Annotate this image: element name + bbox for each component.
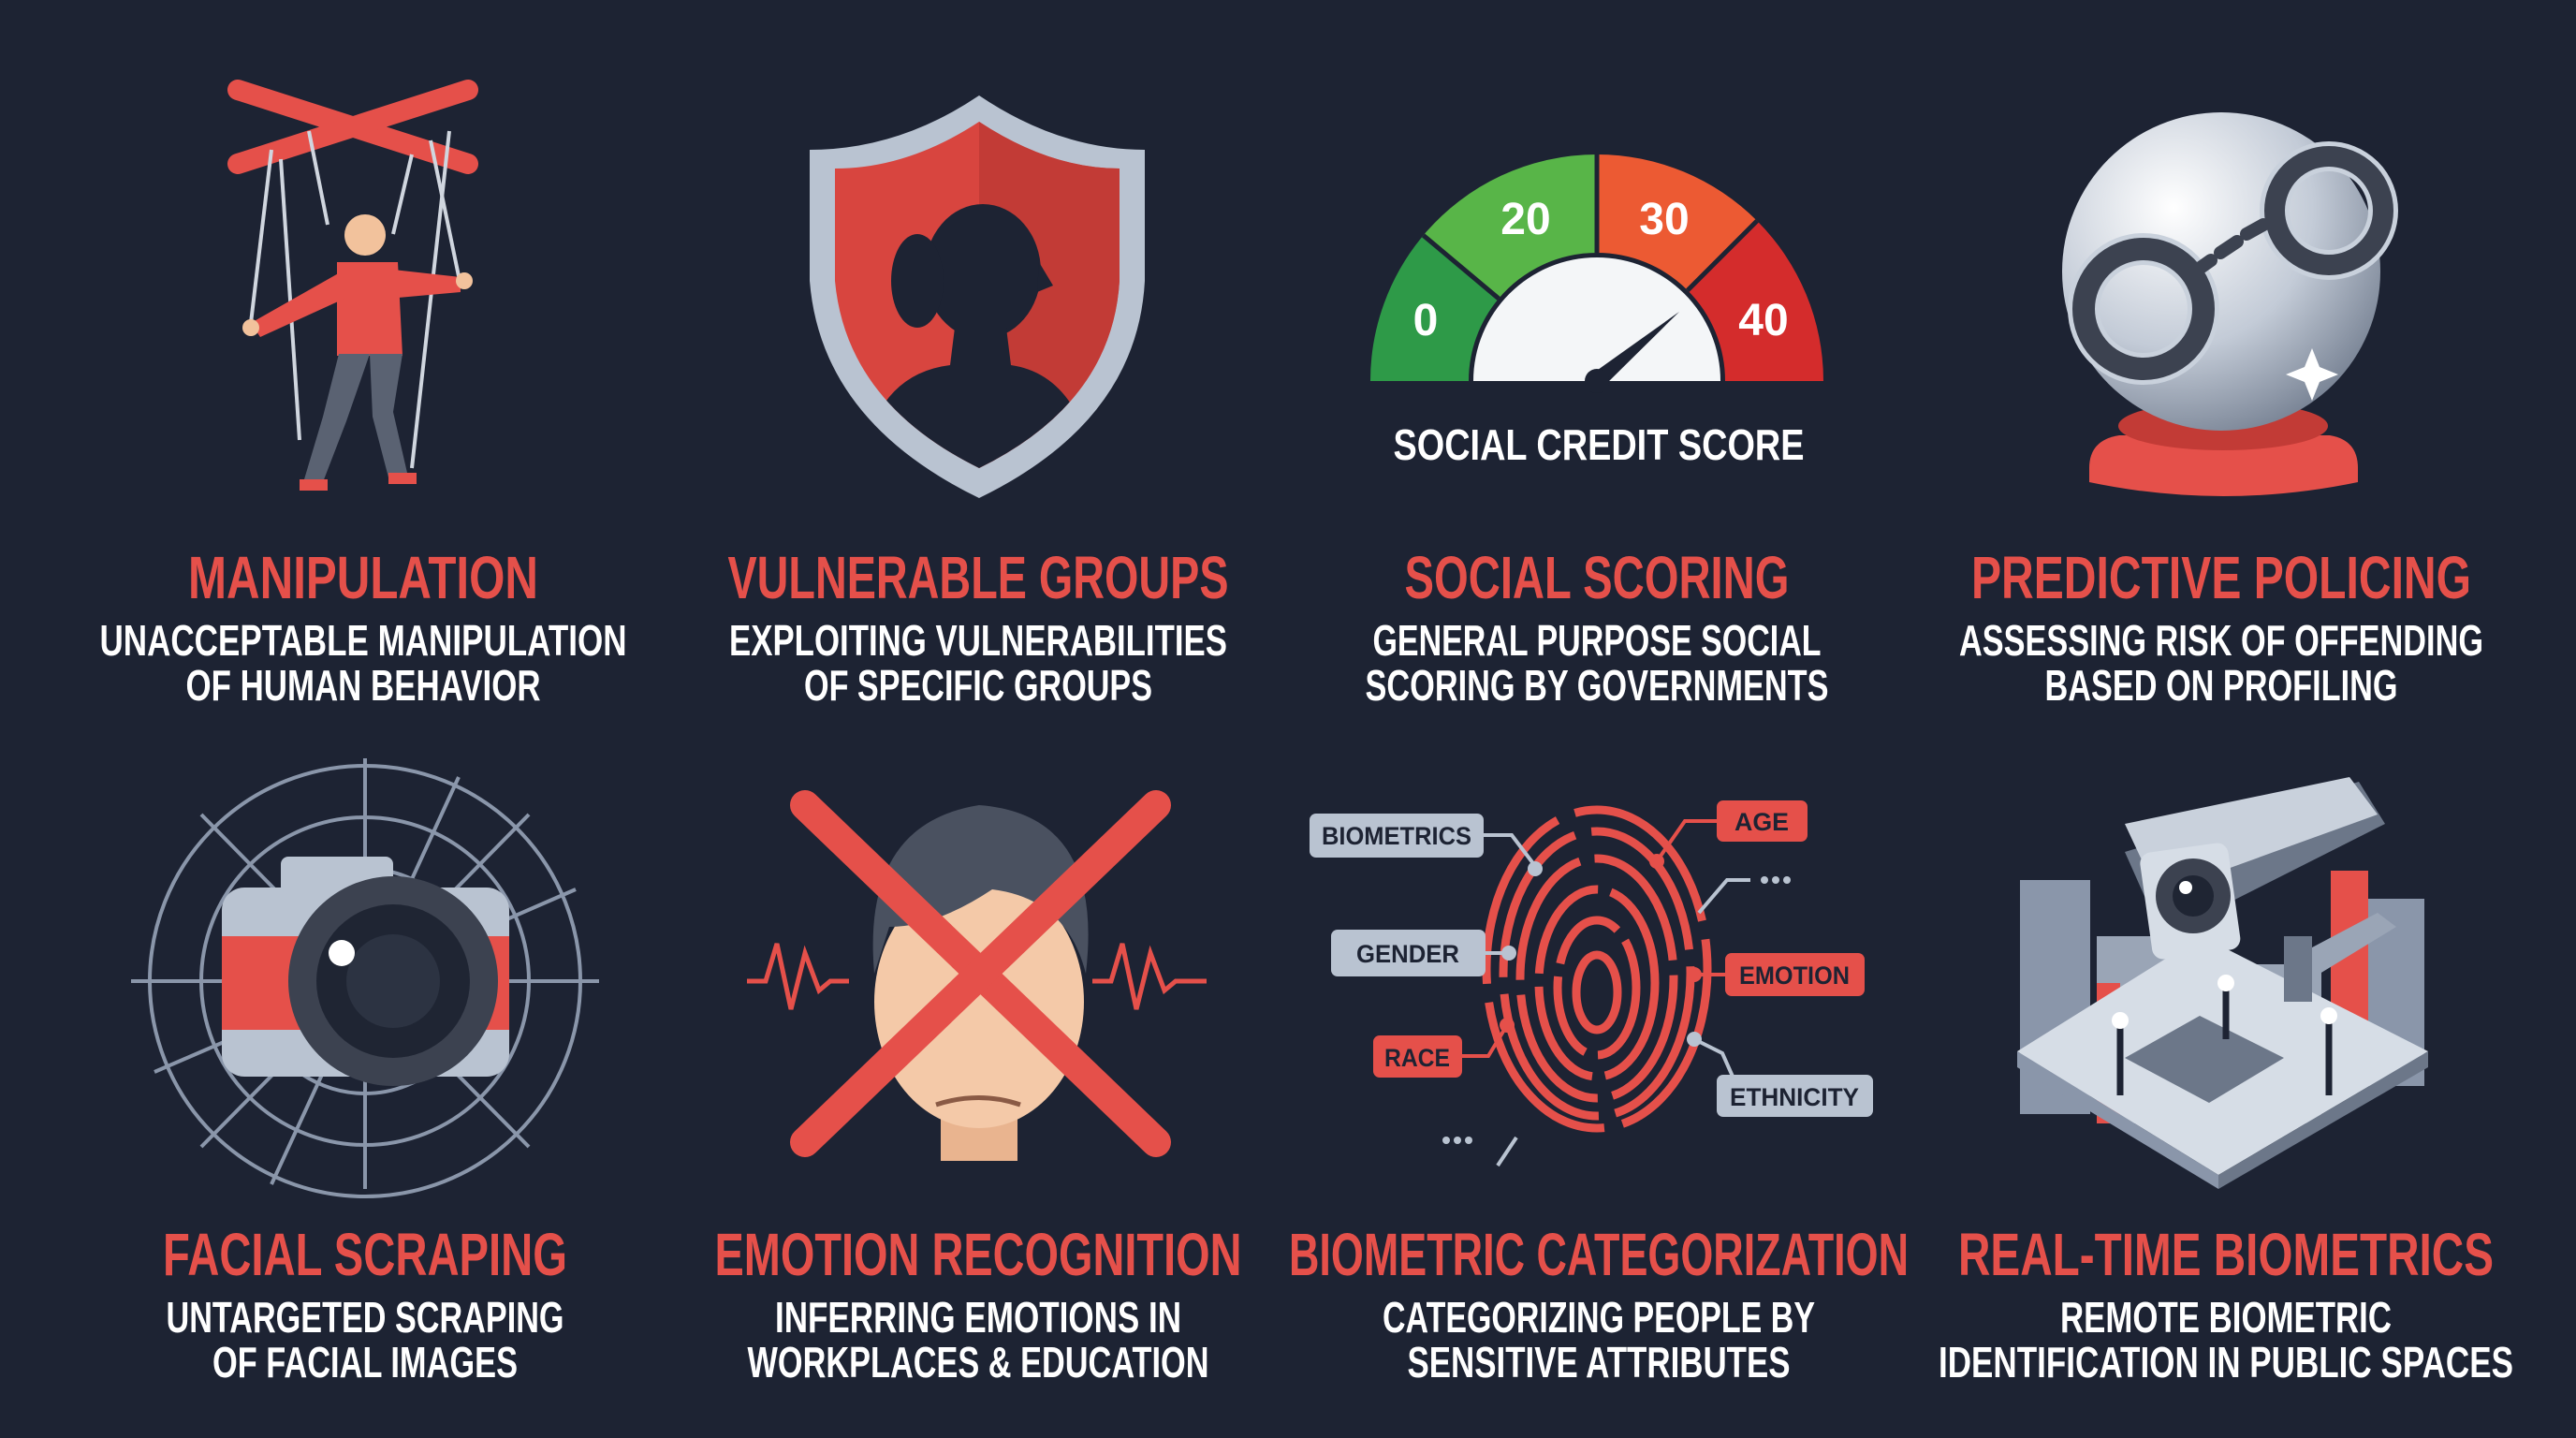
icon: social credit gauge <box>1370 154 1823 469</box>
heading row 2: CATEGORIZING PEOPLE BY <box>1383 1293 1815 1342</box>
heading row 1: SCORING BY GOVERNMENTS <box>1365 661 1829 710</box>
heading row 2: OF FACIAL IMAGES <box>212 1338 518 1387</box>
icon: fingerprint with labels: AGE <box>1734 808 1789 836</box>
icon: fingerprint with labels: ETHNICITY <box>1730 1083 1859 1111</box>
heading row 1: OF HUMAN BEHAVIOR <box>185 661 541 710</box>
icon: shield with silhouette <box>810 95 1145 498</box>
icon: fingerprint with labels: RACE <box>1384 1044 1450 1072</box>
heading row 1: SOCIAL SCORING <box>1404 544 1790 611</box>
heading row 2 <box>163 1221 2513 1387</box>
icon: crystal ball with handcuffs <box>2062 112 2383 496</box>
icon: web with camera <box>131 758 599 1196</box>
heading row 1: GENERAL PURPOSE SOCIAL <box>1372 616 1822 665</box>
icon: fingerprint with labels: BIOMETRICS <box>1322 822 1471 850</box>
heading row 2: FACIAL SCRAPING <box>163 1221 567 1288</box>
icon: fingerprint with labels: GENDER <box>1356 940 1459 968</box>
icon: surveillance camera over city <box>2017 777 2428 1189</box>
heading row 1: MANIPULATION <box>188 544 538 611</box>
icon: face with red X <box>747 805 1207 1161</box>
heading row 1: BASED ON PROFILING <box>2044 661 2398 710</box>
heading row 1: EXPLOITING VULNERABILITIES <box>729 616 1227 665</box>
heading row 2: REMOTE BIOMETRIC <box>2060 1293 2392 1342</box>
heading row 2: EMOTION RECOGNITION <box>715 1221 1241 1288</box>
heading row 2: INFERRING EMOTIONS IN <box>775 1293 1181 1342</box>
icon: fingerprint with labels <box>1310 800 1873 1166</box>
icon: social credit gauge: 20 <box>1500 195 1551 244</box>
icon: marionette <box>238 90 473 491</box>
heading row 1 <box>99 544 2483 710</box>
icon: social credit gauge: 0 <box>1413 296 1438 345</box>
heading row 1: OF SPECIFIC GROUPS <box>804 661 1152 710</box>
heading row 1: VULNERABLE GROUPS <box>728 544 1228 611</box>
heading row 2: SENSITIVE ATTRIBUTES <box>1408 1338 1790 1387</box>
icon: social credit gauge: SOCIAL CREDIT SCORE <box>1393 420 1805 469</box>
heading row 2: UNTARGETED SCRAPING <box>167 1293 564 1342</box>
heading row 1: UNACCEPTABLE MANIPULATION <box>99 616 627 665</box>
heading row 2: BIOMETRIC CATEGORIZATION <box>1289 1221 1909 1288</box>
icon: fingerprint with labels: EMOTION <box>1739 961 1850 990</box>
icon: social credit gauge: 40 <box>1738 296 1789 345</box>
heading row 2: WORKPLACES & EDUCATION <box>747 1338 1209 1387</box>
icon: social credit gauge: 30 <box>1639 195 1690 244</box>
